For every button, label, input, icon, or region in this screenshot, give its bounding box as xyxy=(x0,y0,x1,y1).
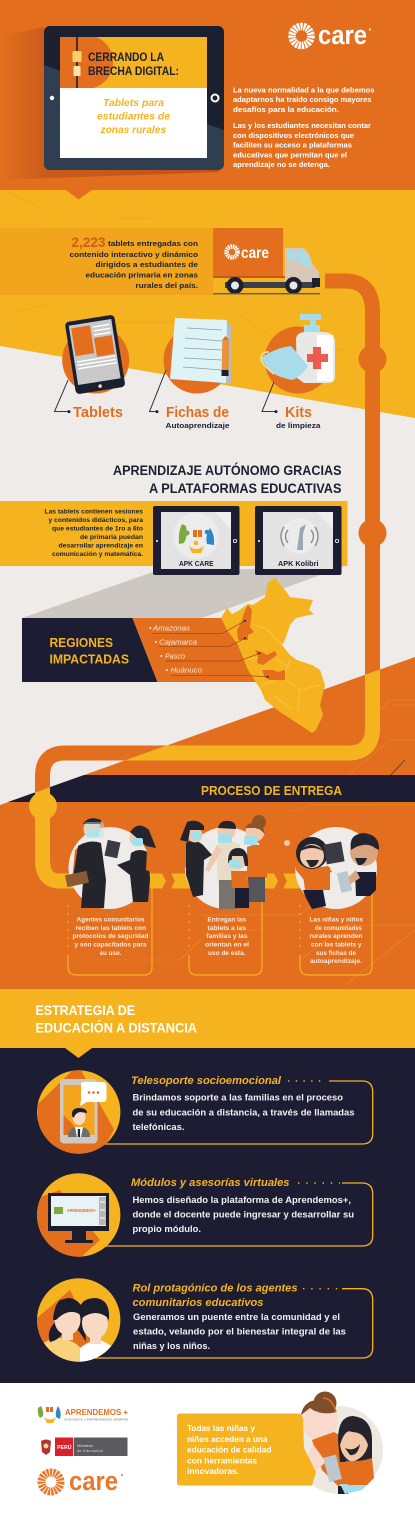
platforms text: y contenidos didácticos, para xyxy=(48,517,144,524)
label: Tablets xyxy=(73,405,123,421)
strategy 2 title: Módulos y asesorías virtuales xyxy=(131,1177,290,1189)
tablet: APK CARE xyxy=(153,506,240,575)
strategy 1 body xyxy=(132,1093,354,1132)
region labels and leaders: Amazonas xyxy=(152,624,190,632)
process text: con las tablets y xyxy=(311,942,362,948)
delivery text: contenido interactivo y dinámico xyxy=(70,250,198,259)
intro text: adaptarnos ha traído consigo mayores xyxy=(233,95,372,104)
process text: uso de esta. xyxy=(208,950,246,957)
region labels and leaders: Pasco xyxy=(165,652,185,660)
arrow notch: header xyxy=(66,190,92,200)
process text: familias y las xyxy=(206,933,248,940)
intro text: aprendizaje no se detenga. xyxy=(233,160,330,169)
footer dot texture xyxy=(0,1383,415,1536)
closing callout: innovadoras. xyxy=(187,1466,239,1476)
strategy 2 icon: APRENDEMOS+ xyxy=(67,1208,96,1213)
platforms text: Las tablets contienen sesiones xyxy=(44,508,144,516)
process text: reciben las tablets con xyxy=(76,925,146,932)
closing callout: niños acceden a una xyxy=(187,1434,268,1444)
strategy 1 body: telefónicas. xyxy=(132,1122,184,1132)
process text: rurales aprenden xyxy=(310,933,363,940)
item: fichas: Autoaprendizaje xyxy=(166,421,230,430)
strategy 2 body: propio módulo. xyxy=(132,1224,201,1234)
strategy 3 body: niñas y los niños. xyxy=(133,1341,210,1351)
header tablet shadow xyxy=(0,27,224,180)
strategy 3 body: Generamos un puente entre la comunidad y el xyxy=(133,1312,340,1322)
background: light section xyxy=(0,190,415,810)
leader line xyxy=(262,382,276,412)
strategy 3 title: comunitarios educativos xyxy=(132,1297,264,1309)
logo: Aprendemos+ xyxy=(38,1406,128,1423)
strategy 3 outline xyxy=(95,1289,373,1358)
strategy 2 icon xyxy=(37,1173,120,1260)
process text: Las niñas y niños xyxy=(310,916,363,924)
logo: Aprendemos+: CRECEMOS Y EMPRENDEMOS SIEMPRE xyxy=(64,1418,128,1422)
closing callout: educación de calidad xyxy=(187,1445,272,1455)
highlighted regions xyxy=(237,605,285,680)
delivery text: rurales del país. xyxy=(136,281,198,290)
background: yellow diagonal xyxy=(0,190,415,418)
intro text: con dispositivos electrónicos que xyxy=(233,131,354,140)
process text: Entregan las xyxy=(208,916,246,924)
delivery text: 2,223 xyxy=(72,234,106,250)
label: APK CARE xyxy=(179,559,214,568)
strategy 3 title: Rol protagónico de los agentes xyxy=(132,1283,298,1295)
heading: estrategia: EDUCACIÓN A DISTANCIA xyxy=(36,1019,197,1036)
dark section xyxy=(0,1048,415,1383)
heading: aprendizaje autónomo: A PLATAFORMAS EDUCATIVAS xyxy=(149,481,342,496)
platforms text: de primaria puedan xyxy=(80,534,143,541)
strategy 2 body: donde el docente puede ingresar y desarrollar su xyxy=(132,1210,354,1220)
process text: Agentes comunitarios xyxy=(76,916,145,924)
label: Kits xyxy=(285,405,312,421)
heading: proceso de entrega: PROCESO DE ENTREGA xyxy=(201,783,343,798)
process text: tablets a las xyxy=(208,925,246,932)
region labels and leaders: Cajamarca xyxy=(159,638,197,646)
region labels and leaders: • xyxy=(154,638,158,646)
strategy 3 body xyxy=(133,1312,346,1351)
map of Peru xyxy=(221,578,325,733)
strategy 2 body xyxy=(132,1195,354,1234)
regions panel: IMPACTADAS xyxy=(50,652,129,666)
background: orange header xyxy=(0,0,415,190)
route path xyxy=(42,281,372,881)
delivery band xyxy=(0,228,213,295)
tablet screen xyxy=(60,37,207,158)
regions title: REGIONES xyxy=(50,635,113,650)
tablet: APK Kolibri xyxy=(255,506,342,575)
heading: estrategia xyxy=(36,1002,197,1036)
process text: y son capacitados para xyxy=(74,942,147,948)
label: Fichas de xyxy=(166,405,229,421)
logo: Ministerio de Educación: PERÚ xyxy=(57,1444,72,1451)
closing callout xyxy=(177,1414,316,1486)
process step 3 illustration xyxy=(284,827,379,909)
regions panel xyxy=(22,618,262,682)
strategy 2 body: Hemos diseñado la plataforma de Aprendemos+, xyxy=(132,1195,351,1205)
process step 1 illustration xyxy=(65,818,156,909)
logo: CARE white: care xyxy=(318,20,367,50)
band behind process title xyxy=(8,775,415,802)
logo: CARE orange xyxy=(42,1466,123,1496)
item: tablets xyxy=(54,315,129,421)
closing callout: con herramientas xyxy=(187,1455,257,1465)
strategy 1 title: Telesoporte socioemocional xyxy=(131,1075,282,1087)
tablet subtitle: zonas rurales xyxy=(100,124,166,136)
header tablet xyxy=(44,26,224,170)
intro text: La nueva normalidad a la que debemos xyxy=(233,86,374,94)
strategy 1 outline xyxy=(105,1081,373,1144)
background: orange diagonal xyxy=(0,657,415,990)
platforms text: desarrollar aprendizaje en xyxy=(58,542,143,549)
arrow notch: estrategia xyxy=(65,1048,92,1058)
tablet subtitle: Tablets para xyxy=(103,97,164,109)
closing illustration xyxy=(274,1392,383,1494)
delivery text xyxy=(70,234,198,290)
region labels and leaders xyxy=(149,620,269,678)
route nodes xyxy=(29,345,386,820)
strategy 1 icon xyxy=(37,1070,120,1154)
item: fichas xyxy=(150,318,231,430)
platforms text: comunicación y matemática. xyxy=(52,551,143,558)
band: estrategia xyxy=(0,989,415,1048)
strategy 1 body: Brindamos soporte a las familias en el proceso xyxy=(132,1093,343,1103)
footer background xyxy=(0,1383,415,1536)
intro text xyxy=(233,86,374,169)
process outlines xyxy=(68,888,372,975)
process text: protocolos de seguridad xyxy=(72,933,149,940)
platforms band xyxy=(0,501,348,566)
logo: Ministerio de Educación xyxy=(41,1438,128,1456)
delivery text: educación primaria en zonas xyxy=(86,270,198,280)
heading: aprendizaje autónomo xyxy=(113,463,342,496)
strategy 2 outline xyxy=(105,1183,373,1246)
region labels and leaders: • xyxy=(149,624,152,632)
closing callout: Todas las niñas y xyxy=(187,1423,255,1433)
process step 2 illustration xyxy=(180,815,267,909)
region labels and leaders: Huánuco xyxy=(170,666,202,674)
item: kits xyxy=(261,314,335,430)
intro text: desafíos para la educación. xyxy=(233,105,339,114)
tablet title: CERRANDO LA xyxy=(88,51,164,64)
truck logo xyxy=(226,246,238,258)
delivery text: tablets entregadas con xyxy=(108,239,198,248)
tablet title xyxy=(88,51,179,78)
heading: aprendizaje autónomo: APRENDIZAJE AUTÓNOMO GRACIAS xyxy=(113,463,342,478)
strategy 3 title xyxy=(132,1283,298,1309)
platforms text: que estudiantes de 1ro a 6to xyxy=(52,526,143,533)
process chevrons xyxy=(150,874,300,888)
logo: CARE white xyxy=(292,20,371,50)
intro text: faciliten su acceso a plataformas xyxy=(233,140,352,150)
intro text: Las y los estudiantes necesitan contar xyxy=(233,121,371,130)
process text xyxy=(72,916,363,965)
logo: Ministerio de Educación: de Educación xyxy=(77,1449,103,1453)
decorative circuit lines xyxy=(0,190,415,985)
tablet subtitle: estudiantes de xyxy=(97,110,170,122)
intro text: educativas que permitan que el xyxy=(233,150,347,160)
logo: Aprendemos+: APRENDEMOS + xyxy=(65,1407,128,1417)
truck xyxy=(213,228,320,294)
region labels and leaders: • xyxy=(160,652,163,660)
tablet subtitle xyxy=(97,97,170,136)
process text: su uso. xyxy=(100,950,122,957)
grey shadow shape xyxy=(22,566,345,618)
process text: orientan en el xyxy=(205,942,249,948)
logo: CARE orange: care xyxy=(69,1466,118,1496)
delivery text: dirigidos a estudiantes de xyxy=(96,260,198,269)
tablet title: BRECHA DIGITAL: xyxy=(88,65,179,78)
leader line xyxy=(150,370,166,412)
heading: estrategia: ESTRATEGIA DE xyxy=(36,1002,135,1018)
strategy 3 icon xyxy=(36,1278,120,1365)
process text: de comunidades xyxy=(315,925,362,932)
item: kits: de limpieza xyxy=(276,421,321,430)
logo: Ministerio de Educación: Ministerio xyxy=(77,1444,93,1448)
strategy 1 body: de su educación a distancia, a través de llamadas xyxy=(132,1108,354,1118)
truck: care xyxy=(241,245,269,262)
process text: sus fichas de xyxy=(316,950,356,957)
region labels and leaders: • xyxy=(166,666,168,674)
platforms text xyxy=(44,508,144,558)
label: APK Kolibri xyxy=(278,559,318,568)
process text: autoaprendizaje. xyxy=(310,958,362,965)
leader line xyxy=(54,380,69,412)
strategy 3 body: estado, velando por el bienestar integral de las xyxy=(133,1326,346,1336)
